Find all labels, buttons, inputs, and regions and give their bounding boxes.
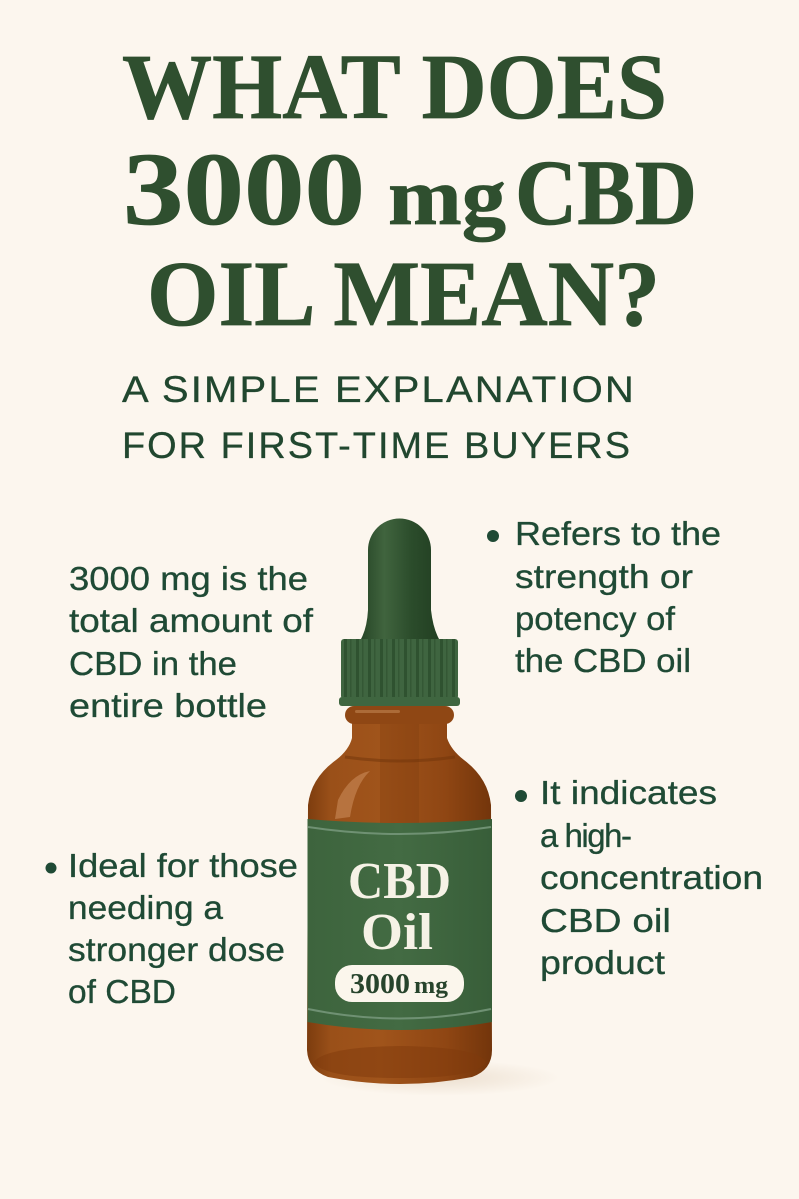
text block: total amount: CBD in the xyxy=(69,645,237,682)
dosage pill: mg xyxy=(414,973,448,999)
subtitle: FOR FIRST-TIME BUYERS xyxy=(122,425,632,466)
dosage pill xyxy=(335,965,464,1002)
amber glass body xyxy=(307,723,492,1084)
text block: total amount xyxy=(69,560,314,724)
bullet: stronger dose: stronger dose xyxy=(68,931,285,968)
bullet: stronger dose: of CBD xyxy=(68,973,176,1010)
bullet: stronger dose: Ideal for those xyxy=(68,847,298,884)
bullet: high concentration: concentration xyxy=(540,859,763,896)
neck ring xyxy=(345,706,454,724)
title: OIL MEAN? xyxy=(147,243,660,346)
label: CBD xyxy=(348,853,451,910)
dosage pill: 3000 xyxy=(350,969,410,1000)
title: mg xyxy=(388,151,506,242)
subtitle: A SIMPLE EXPLANATION xyxy=(122,369,636,410)
ribbed cap xyxy=(341,639,458,699)
bullet: high concentration: CBD oil xyxy=(540,902,671,939)
bullet: strength or potency: potency of xyxy=(515,600,676,637)
title xyxy=(122,36,697,346)
text block: total amount: 3000 mg is the xyxy=(69,560,308,597)
text block: total amount: entire bottle xyxy=(69,687,267,724)
bottle shadow xyxy=(320,1060,560,1096)
subtitle xyxy=(122,369,636,466)
label: Oil xyxy=(361,904,433,961)
bullet: strength or potency: strength or xyxy=(515,558,693,595)
bullet: strength or potency: Refers to the xyxy=(515,515,721,552)
bottle illustration xyxy=(307,518,560,1096)
title: CBD xyxy=(515,142,697,245)
bullet: strength or potency xyxy=(487,515,721,679)
bullet: high concentration: a high- xyxy=(540,817,632,854)
bullet: strength or potency: the CBD oil xyxy=(515,642,691,679)
bullet: high concentration: product xyxy=(540,944,665,981)
title: 3000 xyxy=(123,132,365,247)
bullet: stronger dose xyxy=(46,847,298,1010)
dropper bulb xyxy=(361,518,439,639)
bullet: stronger dose: needing a xyxy=(68,889,224,926)
bullet: high concentration: It indicates xyxy=(540,774,717,811)
text block: total amount: total amount of xyxy=(69,602,314,639)
title: WHAT DOES xyxy=(122,36,667,139)
bullet: high concentration xyxy=(515,774,763,981)
label xyxy=(308,819,492,1030)
